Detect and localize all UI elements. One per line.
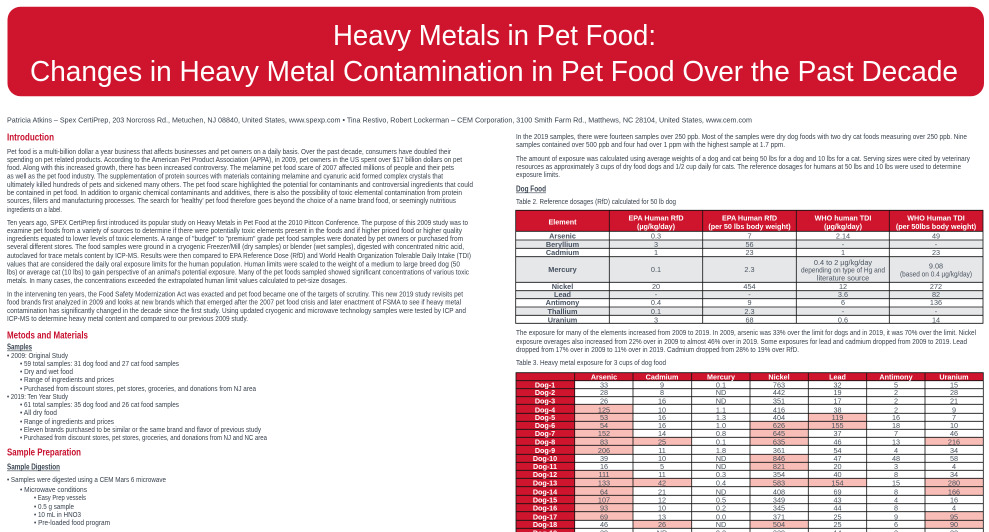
table 3: heavy metal exposure: 9 [660,380,664,389]
table 3: heavy metal exposure: 28 [950,388,958,397]
table 3: heavy metal exposure: 7 [952,413,956,422]
table 3: heavy metal exposure: 40 [833,470,842,479]
table 3: heavy metal exposure: 408 [773,487,785,496]
table 3: heavy metal exposure: Dog-1 [535,380,555,389]
table 2: reference dosages: - [655,290,658,299]
table 3: heavy metal exposure: Nickel [768,372,790,381]
text block: introduction paragraph 1: spending on pet related products. According to the American Pet Product Association (APPA), in 2009, pet owners in the US spent over $17 billion dollars on pet [7,155,463,164]
table 2: reference dosages: WHO human TDI [815,213,871,222]
table 3: heavy metal exposure: 0.1 [716,437,726,446]
table 3: heavy metal exposure: 21 [658,487,666,496]
table 3: heavy metal exposure: 21 [950,396,958,405]
table 3: heavy metal exposure: 16 [658,421,666,430]
text block: samples list: • 2009: Original Study [7,351,68,360]
table 2: reference dosages: 12 [839,282,847,291]
table 3: heavy metal exposure: Dog-16 [533,503,557,512]
text block: introduction paragraph 2 [7,218,471,285]
text block: samples list: • Range of ingredients and prices [20,417,114,426]
table 2: reference dosages: depending on type of Hg and [801,266,885,275]
table 3: heavy metal exposure: 5 [660,462,664,471]
table 3: heavy metal exposure: 5 [894,380,898,389]
table 3: heavy metal exposure: 821 [773,462,785,471]
table 3: heavy metal exposure: 1.8 [716,446,726,455]
table 2: reference dosages: 1 [654,248,658,257]
table 3: heavy metal exposure: 1.0 [716,421,726,430]
table 3 caption: Table 3. Heavy metal exposure for 3 cups of dog food [516,358,666,367]
table 3: heavy metal exposure: 345 [773,503,785,512]
text block: sample digestion list: • 0.5 g sample [34,502,74,511]
table 3: heavy metal exposure: 280 [948,478,960,487]
text block: samples list [7,351,268,442]
table 2: reference dosages: (µg/kg/day) [824,222,863,231]
table 3: heavy metal exposure: 16 [658,413,666,422]
text block: introduction paragraph 2: ingredients equated to lower levels of toxic elements. A range of "budget" to "premium" grade pet food samples were donated by pet owners or purchased from [7,234,463,243]
text block: introduction paragraph 1: ultimately killed hundreds of pets and sickened many others. The pet food scare highlighted the potential for contaminants and controversial ingredients that could [7,180,473,189]
text block: introduction paragraph 1 [7,147,473,214]
text block: introduction paragraph 3 [7,290,466,323]
title banner: Heavy Metals in Pet Food: [333,20,656,52]
table 3: heavy metal exposure: Dog-17 [533,512,557,521]
table 2: reference dosages: 2.14 [836,231,850,240]
table 3: heavy metal exposure [516,372,983,532]
table 2: reference dosages: 136 [930,298,942,307]
text block: introduction paragraph 2: several different stores. The food samples were ground in a cryogenic Freezer/Mill (dry samples) or blender (wet samples), digested with concentrated nitric acid, [7,242,464,251]
table 2: reference dosages: 3.6 [838,290,848,299]
table 3: heavy metal exposure: 18 [892,421,900,430]
table 3: heavy metal exposure: 371 [773,512,785,521]
table 2: reference dosages: 23 [932,248,940,257]
authors line: Patricia Atkins – Spex CertiPrep, 203 Norcross Rd., Metuchen, NJ 08840, United States, www.spexp.com • Tina Restivo, Robert Lockerman – CEM Corporation, 3100 Smith Farm Rd., Matthews, NC 28104, United States, www.cem.com [7,116,752,124]
text block: samples list: • Purchased from discount stores, pet stores, groceries, and donations from NJ area [20,384,257,393]
table 3: heavy metal exposure: 9 [894,512,898,521]
subheading: sample digestion: Sample Digestion [7,462,60,471]
table 3: heavy metal exposure: 125 [598,405,610,414]
table 3: heavy metal exposure: 846 [773,454,785,463]
table 3: heavy metal exposure: Dog-2 [535,388,555,397]
table 3: heavy metal exposure: 583 [773,478,785,487]
text block: 2019 samples summary [516,132,967,149]
text block: introduction paragraph 1: ingredients on a label. [7,205,62,214]
table 2: reference dosages: (per 50 lbs body weight) [708,222,791,231]
table 2: reference dosages: 2.3 [744,265,755,274]
text block: introduction paragraph 3: In the intervening ten years, the Food Safety Modernization Act was exacted and pet food became one of the targets of scrutiny. This new 2019 study revisits pet [7,290,464,298]
title banner: Changes in Heavy Metal Contamination in Pet Food Over the Past Decade [30,56,958,88]
table 2: reference dosages: (µg/kg/day) [637,222,676,231]
table 3: heavy metal exposure: 13 [892,437,900,446]
text block: 2019 samples summary: samples contained over 500 ppb and four had over 1 ppm with the highest sample at 1.7 ppm. [516,140,785,149]
table 3: heavy metal exposure: 351 [773,396,785,405]
table 3: heavy metal exposure: 69 [833,487,842,496]
table 3: heavy metal exposure: 3 [894,462,898,471]
table 2: reference dosages: Antimony [546,298,580,307]
table 2: reference dosages: - [842,307,845,316]
table 3: heavy metal exposure: 10 [658,503,666,512]
table 3: heavy metal exposure: 8 [894,487,898,496]
table 3: heavy metal exposure: 83 [600,437,608,446]
table 3: heavy metal exposure: 626 [773,421,785,430]
table 2: reference dosages: 0.4 to 2 µg/kg/day [814,258,872,267]
table 3: heavy metal exposure: ND [716,520,726,529]
table 2: reference dosages: 14 [932,315,940,324]
table 3: heavy metal exposure: 54 [600,421,608,430]
table 2: reference dosages [516,210,983,324]
table 3: heavy metal exposure: 2 [894,405,898,414]
table 3: heavy metal exposure: 4 [952,503,956,512]
table 3: heavy metal exposure: 0.5 [716,495,726,504]
table 3: heavy metal exposure: 107 [598,495,610,504]
table 3: heavy metal exposure: 0.4 [716,478,726,487]
text block: introduction paragraph 1: Pet food is a multi-billion dollar a year business that affects businesses and pet owners on a daily basis. Over the past decade, consumers have doubled their [7,147,451,156]
table 2: reference dosages: 20 [652,282,660,291]
table 2: reference dosages: Uranium [548,315,578,324]
table 3: heavy metal exposure: Dog-3 [535,396,555,405]
table 3: heavy metal exposure: 349 [773,495,785,504]
table 3: heavy metal exposure: 44 [833,503,842,512]
table 3: heavy metal exposure: 7 [894,429,898,438]
table 3: heavy metal exposure: 16 [892,413,900,422]
table 3: heavy metal exposure: 46 [833,437,842,446]
table 3: heavy metal exposure: 42 [658,478,666,487]
text block: introduction paragraph 3: contamination has significantly changed in the decade since the first study. Using updated cryogenic and microwave technology samples were tested by ICP and [7,306,466,315]
table 2: reference dosages: - [935,240,938,249]
table 3: heavy metal exposure: ND [716,462,726,471]
table 3: heavy metal exposure: 11 [658,446,666,455]
table 2: reference dosages: 2.3 [744,307,755,316]
table 2: reference dosages: Element [549,217,577,226]
table 3: heavy metal exposure: 763 [773,380,785,389]
table 3: heavy metal exposure: 133 [598,478,610,487]
table 3: heavy metal exposure: 416 [773,405,785,414]
heading: sample preparation: Sample Preparation [7,448,81,458]
table 3: heavy metal exposure: 48 [892,454,900,463]
table 2: reference dosages: 68 [745,315,754,324]
table 2: reference dosages: 23 [745,248,754,257]
table 2: reference dosages: Thallium [548,307,578,316]
subheading: dog food: Dog Food [516,184,546,193]
table 2: reference dosages: 56 [745,240,754,249]
table 3: heavy metal exposure: Antimony [879,372,913,381]
table 2: reference dosages: literature source [817,273,869,282]
text block: exposure calculation: exposure limits. [516,170,560,179]
table 2 caption: Table 2. Reference dosages (RfD) calculated for 50 lb dog [516,197,676,206]
table 3: heavy metal exposure: Dog-10 [533,454,557,463]
table 3: heavy metal exposure: 0.0 [716,512,726,521]
table 3: heavy metal exposure: 12 [658,495,666,504]
table 3: heavy metal exposure: 95 [950,512,958,521]
table 2: reference dosages: 272 [930,282,942,291]
table 3: heavy metal exposure: Dog-11 [533,462,557,471]
text block: sample digestion list: • Easy Prep vessels [34,493,86,502]
table 2: reference dosages: Nickel [552,282,573,291]
table 2: reference dosages: - [842,240,845,249]
table 2: reference dosages: 0.3 [651,231,661,240]
table 3: heavy metal exposure: 16 [600,462,608,471]
text block: introduction paragraph 2: Ten years ago, SPEX CertiPrep first introduced its popular study on Heavy Metals in Pet Food at the 2010 Pittcon Conference. The purpose of this 2009 study was to [7,218,468,227]
text block: samples list: • Dry and wet food [20,367,73,376]
table 3: heavy metal exposure: 15 [892,478,900,487]
table 3: heavy metal exposure: 10 [658,454,666,463]
table 3: heavy metal exposure: Dog-12 [533,470,557,479]
text block: samples list: • Range of ingredients and prices [20,375,114,384]
text block: introduction paragraph 2: examine pet foods from a variety of sources to determine if there were potentially toxic elements present in the foods and if higher priced food or higher quality [7,226,462,235]
table 3: heavy metal exposure: 26 [600,396,608,405]
table 3: heavy metal exposure: 0.2 [716,503,726,512]
table 2: reference dosages: - [748,290,751,299]
table 2: reference dosages: 454 [743,282,756,291]
table 3: heavy metal exposure: 8 [660,388,664,397]
table 3: heavy metal exposure: Arsenic [591,372,617,381]
table 3: heavy metal exposure: 1.3 [716,413,726,422]
table 3: heavy metal exposure: 33 [600,380,608,389]
table 3: heavy metal exposure: 504 [773,520,785,529]
table 3: heavy metal exposure: Dog-5 [535,413,555,422]
text block: introduction paragraph 2: metals. In many cases, the concentrations exceeded the extrapolated human limit values calculated to pet-size dosages. [7,276,347,285]
table 3: heavy metal exposure: 10 [658,405,666,414]
text block: introduction paragraph 1: be contained in pet food. In addition to organic chemical contaminants and additives, there is also the possibility of toxic elemental contamination from protein [7,188,462,197]
table 3: heavy metal exposure: 0.3 [716,470,726,479]
table 3: heavy metal exposure: Dog-8 [535,437,555,446]
table 2: reference dosages: 0.4 [651,298,661,307]
table 3: heavy metal exposure: Dog-14 [533,487,557,496]
table 3: heavy metal exposure: 53 [600,413,608,422]
table 3: heavy metal exposure: 37 [833,429,842,438]
table 3: heavy metal exposure: ND [716,487,726,496]
text block: exposure calculation [516,154,970,179]
table 3: heavy metal exposure: Dog-13 [533,478,557,487]
table 3: heavy metal exposure: Dog-18 [533,520,557,529]
table 3: heavy metal exposure: 8 [894,503,898,512]
table 3: heavy metal exposure: 43 [833,495,842,504]
table 2: reference dosages: 7 [747,231,752,240]
table 2: reference dosages: Beryllium [546,240,580,249]
table 3: heavy metal exposure: 39 [600,454,608,463]
table 3: heavy metal exposure: 404 [773,413,785,422]
text block: sample digestion list: • Microwave conditions [20,485,87,494]
table 2: reference dosages: 0.1 [651,307,661,316]
text block: introduction paragraph 1: as well as the pet food industry. The supplementation of protein sources with materials containing melamine and cyanuric acid formed complex crystals that [7,172,444,180]
table 3: heavy metal exposure: 38 [833,405,842,414]
table 2: reference dosages: 0.6 [838,315,848,324]
table 3: heavy metal exposure: ND [716,396,726,405]
table 2: reference dosages: Mercury [548,265,578,274]
table 2: reference dosages: (based on 0.4 µg/kg/day) [900,269,972,278]
table 3: heavy metal exposure: 155 [831,421,844,430]
table 3: heavy metal exposure: 0.8 [716,429,726,438]
table 3: heavy metal exposure: Dog-9 [535,446,555,455]
table 3: heavy metal exposure: 15 [950,380,958,389]
table 3: heavy metal exposure: Dog-7 [535,429,555,438]
text block: introduction paragraph 3: ICP-MS to determine heavy metal content and compared to our previous 2009 study. [7,314,248,323]
table 3: heavy metal exposure: 635 [773,437,785,446]
text block: exposure findings [516,328,976,354]
table 3: heavy metal exposure: 361 [773,446,785,455]
text block: introduction paragraph 2: autoclaved for trace metals content by ICP-MS. Results were then compared to EPA Reference Dose (RfD) and World Health Organization Tolerable Daily Intake (TDI) [7,251,471,260]
text block: sample digestion list: • 10 mL in HNO3 [34,510,81,519]
heading: introduction: Introduction [7,132,54,144]
table 3: heavy metal exposure: 47 [833,454,842,463]
table 3: heavy metal exposure: 4 [894,446,898,455]
table 2: reference dosages: EPA Human RfD [722,213,777,222]
table 3: heavy metal exposure: 19 [833,388,842,397]
text block: samples list: • 61 total samples: 35 dog food and 26 cat food samples [20,400,179,409]
table 2: reference dosages: 1 [841,248,845,257]
table 3: heavy metal exposure: 2 [894,388,898,397]
table 2: reference dosages: EPA Human RfD [628,213,684,222]
table 2: reference dosages: - [935,307,938,316]
table 3: heavy metal exposure: 354 [773,470,785,479]
table 3: heavy metal exposure: 25 [833,512,842,521]
table 3: heavy metal exposure: Dog-15 [533,495,557,504]
table 3: heavy metal exposure: 0.1 [716,380,726,389]
text block: introduction paragraph 1: food. Along with this increased growth, there has been increased controversy. The melamine pet food scare of 2007 affected millions of people and their pets [7,163,454,172]
table 2: reference dosages: 6 [841,298,845,307]
table 3: heavy metal exposure: 8 [894,470,898,479]
table 3: heavy metal exposure: 34 [950,446,958,455]
table 2: reference dosages: 3 [654,315,658,324]
table 2: reference dosages: 3 [654,240,658,249]
table 3: heavy metal exposure: 152 [598,429,610,438]
text block: samples list: • Purchased from discount stores, pet stores, groceries, and donations from NJ and NC area [20,433,268,442]
table 3: heavy metal exposure: 119 [832,413,843,422]
table 3: heavy metal exposure: 111 [598,470,610,479]
text block: sample digestion list [7,475,166,527]
table 3: heavy metal exposure: 6 [894,520,898,529]
table 3: heavy metal exposure: 25 [658,437,666,446]
text block: samples list: • 59 total samples: 31 dog food and 27 cat food samples [20,359,179,368]
text block: introduction paragraph 3: food brands first analyzed in 2009 and looks at new brands which that emerged after the 2007 pet food crisis and later enactment of FSMA to see if heavy metal [7,298,461,306]
table 3: heavy metal exposure: 13 [658,512,666,521]
table 3: heavy metal exposure: 4 [894,495,898,504]
table 3: heavy metal exposure: 10 [950,421,958,430]
table 2: reference dosages: 49 [932,231,940,240]
text block: sample digestion list: • Samples were digested using a CEM Mars 6 microwave [7,475,166,484]
table 3: heavy metal exposure: Dog-4 [535,405,555,414]
text block: samples list: • 2019: Ten Year Study [7,392,68,401]
table 3: heavy metal exposure: 32 [833,380,842,389]
table 3: heavy metal exposure: 20 [833,462,842,471]
table 3: heavy metal exposure: ND [716,388,726,397]
table 3: heavy metal exposure: 11 [658,470,666,479]
table 3: heavy metal exposure: 16 [658,396,666,405]
table 3: heavy metal exposure: 28 [600,388,608,397]
subheading: samples: Samples [7,342,32,351]
table 3: heavy metal exposure: Mercury [707,372,735,381]
table 3: heavy metal exposure: 442 [773,388,785,397]
table 3: heavy metal exposure: 2 [894,396,898,405]
title banner [8,7,984,96]
table 3: heavy metal exposure: Lead [829,372,846,381]
table 2: reference dosages: 82 [932,290,940,299]
table 3: heavy metal exposure: Cadmium [646,372,678,381]
table 3: heavy metal exposure: 93 [600,503,608,512]
table 3: heavy metal exposure: 9 [952,405,956,414]
table 3: heavy metal exposure: 90 [950,520,958,529]
table 3: heavy metal exposure: 25 [833,520,842,529]
heading: methods and materials: Metods and Materials [7,330,88,342]
table 3: heavy metal exposure: 46 [600,520,608,529]
text block: samples list: • Eleven brands purchased to be similar or the same brand and flavor of previous study [20,425,261,434]
text block: introduction paragraph 2: lbs) or average cat (10 lbs) to gain perspective of an animal's potential exposure. Many of the pet foods sampled showed significant concentrations of various toxic [7,268,469,276]
table 3: heavy metal exposure: 34 [950,470,958,479]
table 3: heavy metal exposure: 58 [950,454,958,463]
table 2: reference dosages: 9 [747,298,752,307]
table 2: reference dosages: (per 50lbs body weight) [896,222,977,231]
table 3: heavy metal exposure: 14 [658,429,666,438]
table 3: heavy metal exposure: 154 [831,478,844,487]
table 3: heavy metal exposure: 46 [950,429,958,438]
table 3: heavy metal exposure: 69 [600,512,608,521]
table 3: heavy metal exposure: 206 [598,446,610,455]
table 2: reference dosages: Lead [554,290,571,299]
text block: exposure findings: dropped from 17% over in 2009 to 11% over in 2019. Cadmium dropped from 28% to 19% over RfD. [516,345,799,354]
table 2: reference dosages: Arsenic [549,231,576,240]
text block: samples list: • All dry food [20,408,57,417]
table 3: heavy metal exposure: 166 [948,487,960,496]
table 3: heavy metal exposure: 54 [833,446,842,455]
table 3: heavy metal exposure: ND [716,454,726,463]
table 3: heavy metal exposure: 645 [773,429,785,438]
table 3: heavy metal exposure: 16 [950,495,958,504]
table 3: heavy metal exposure: Uranium [939,372,969,381]
table 3: heavy metal exposure: 216 [948,437,960,446]
table 3: heavy metal exposure: 4 [952,462,956,471]
table 2: reference dosages: 0.1 [651,265,661,274]
table 3: heavy metal exposure: 1.1 [716,405,726,414]
text block: introduction paragraph 2: values that are considered the daily oral exposure limits for the human population. Human limits were scaled to the weight of a medium to large breed dog (50 [7,260,460,268]
table 3: heavy metal exposure: 64 [600,487,608,496]
table 3: heavy metal exposure: Dog-6 [535,421,555,430]
text block: introduction paragraph 1: sources, fillers and manufacturing processes. The search for 'healthy' pet food therefore goes beyond the choice of a name brand food, or seemingly nutritious [7,196,456,205]
table 2: reference dosages: WHO Human TDI [907,213,965,222]
text block: sample digestion list: • Pre-loaded food program [34,518,110,527]
table 2: reference dosages: Cadmium [546,248,580,257]
table 3: heavy metal exposure: 26 [658,520,666,529]
table 2: reference dosages: 9.08 [929,261,943,270]
table 3: heavy metal exposure: 17 [833,396,842,405]
